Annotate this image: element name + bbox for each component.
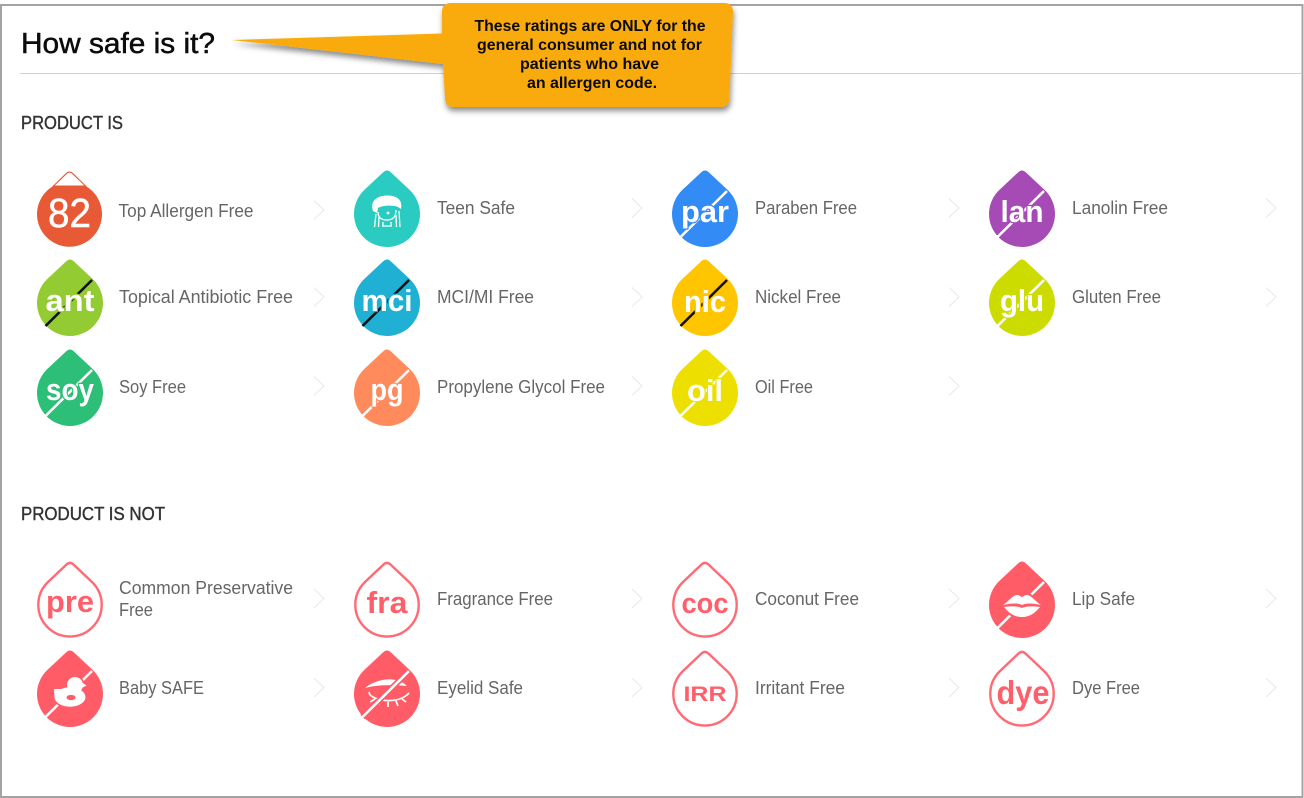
label: Nickel Free: [755, 287, 841, 307]
item: lip safe: [989, 562, 1276, 638]
item: nickel free: [672, 260, 959, 336]
icon: mci: mci: [362, 283, 412, 318]
item: gluten free: [989, 260, 1276, 336]
item: dye free: [990, 652, 1276, 726]
label: Lanolin Free: [1072, 198, 1168, 218]
chevron: [949, 376, 959, 396]
chevron: [314, 589, 324, 608]
icon: dye: [990, 652, 1054, 726]
chevron: [1266, 589, 1276, 608]
icon: pg: [354, 350, 420, 426]
panel: product is not: [21, 504, 1276, 727]
label: MCI/MI Free: [437, 287, 534, 307]
icon: teen: [354, 170, 420, 247]
callout: [232, 3, 733, 107]
item: top allergen free: [37, 172, 324, 247]
icon: nic: [672, 260, 738, 336]
item: propylene glycol free: [354, 350, 642, 426]
icon: soy: [37, 350, 103, 426]
icon: mci: [354, 260, 420, 336]
item: irritant free: [673, 652, 959, 726]
title: How safe is it?: [21, 28, 215, 60]
chevron: [949, 288, 959, 306]
item: mci/mi free: [354, 260, 642, 336]
callout: patients who have: [520, 56, 659, 73]
panel: product is: [21, 113, 1276, 426]
icon: pre: pre: [46, 584, 94, 619]
icon: ant: [37, 260, 103, 336]
item: fragrance free: [355, 563, 642, 637]
icon: pre: [38, 563, 102, 637]
icon: oil: oil: [687, 373, 723, 408]
chevron: [632, 678, 642, 697]
icon: duck: [37, 650, 103, 727]
label: Top Allergen Free: [118, 201, 254, 221]
label: Teen Safe: [437, 198, 515, 218]
chevron: [949, 589, 959, 608]
item: paraben free: [672, 170, 959, 247]
chevron: [1266, 198, 1276, 218]
label: Common Preservative: [119, 578, 293, 598]
callout: an allergen code.: [527, 75, 657, 92]
icon: coc: [673, 563, 737, 637]
icon: par: par: [681, 194, 729, 229]
chevron: [632, 376, 642, 396]
icon: oil: [672, 350, 738, 426]
item: oil free: [672, 350, 959, 426]
icon: glu: glu: [1000, 283, 1044, 318]
label: Fragrance Free: [437, 589, 553, 609]
icon: lips: [989, 562, 1055, 638]
chevron: [314, 376, 324, 396]
chevron: [314, 678, 324, 697]
item: common preservative free: [38, 563, 324, 637]
icon: dye: dye: [996, 674, 1050, 711]
item: soy free: [37, 350, 324, 426]
icon: par: [672, 170, 738, 247]
icon: 82 drop: [37, 172, 102, 247]
label: Irritant Free: [755, 678, 845, 698]
chevron: [632, 589, 642, 608]
icon: pg: pg: [370, 372, 404, 407]
label: Dye Free: [1072, 678, 1140, 698]
icon: fra: [355, 563, 419, 637]
label: Oil Free: [755, 377, 813, 397]
label: Coconut Free: [755, 589, 859, 609]
item: eyelid safe: [354, 650, 642, 727]
icon: ant: ant: [46, 283, 94, 318]
callout: general consumer and not for: [477, 37, 702, 54]
label: Soy Free: [119, 377, 186, 397]
chevron: [632, 198, 642, 218]
label: Eyelid Safe: [437, 678, 523, 698]
item: lanolin free: [989, 170, 1276, 247]
icon: 82 drop: 82: [48, 190, 91, 236]
icon: soy: soy: [46, 372, 95, 407]
callout: These ratings are ONLY for the: [474, 18, 706, 35]
item: baby safe: [37, 650, 324, 727]
label: Propylene Glycol Free: [437, 377, 605, 397]
chevron: [632, 288, 642, 306]
chevron: [949, 678, 959, 697]
item: topical antibiotic free: [37, 260, 324, 336]
icon: lan: lan: [1000, 194, 1044, 229]
item: teen safe: [354, 170, 642, 247]
chevron: [314, 200, 324, 220]
label: Topical Antibiotic Free: [119, 287, 293, 307]
icon: lan: [989, 170, 1055, 247]
icon: irr: [673, 652, 737, 726]
heading: product is: PRODUCT IS: [21, 113, 123, 133]
icon: fra: fra: [366, 585, 408, 620]
icon: eyelid: [354, 650, 420, 727]
icon: coc: coc: [682, 588, 728, 620]
chevron: [1266, 288, 1276, 306]
label line 2: Free: [119, 600, 153, 620]
heading: product is not: PRODUCT IS NOT: [21, 504, 165, 524]
label: Lip Safe: [1072, 589, 1135, 609]
icon: nic: nic: [684, 284, 726, 319]
label: Paraben Free: [755, 198, 857, 218]
icon: glu: [989, 260, 1055, 336]
label: Baby SAFE: [119, 678, 204, 698]
label: Gluten Free: [1072, 287, 1161, 307]
item: coconut free: [673, 563, 959, 637]
icon: irr: IRR: [684, 682, 727, 706]
chevron: [949, 198, 959, 218]
chevron: [314, 288, 324, 306]
chevron: [1266, 678, 1276, 697]
